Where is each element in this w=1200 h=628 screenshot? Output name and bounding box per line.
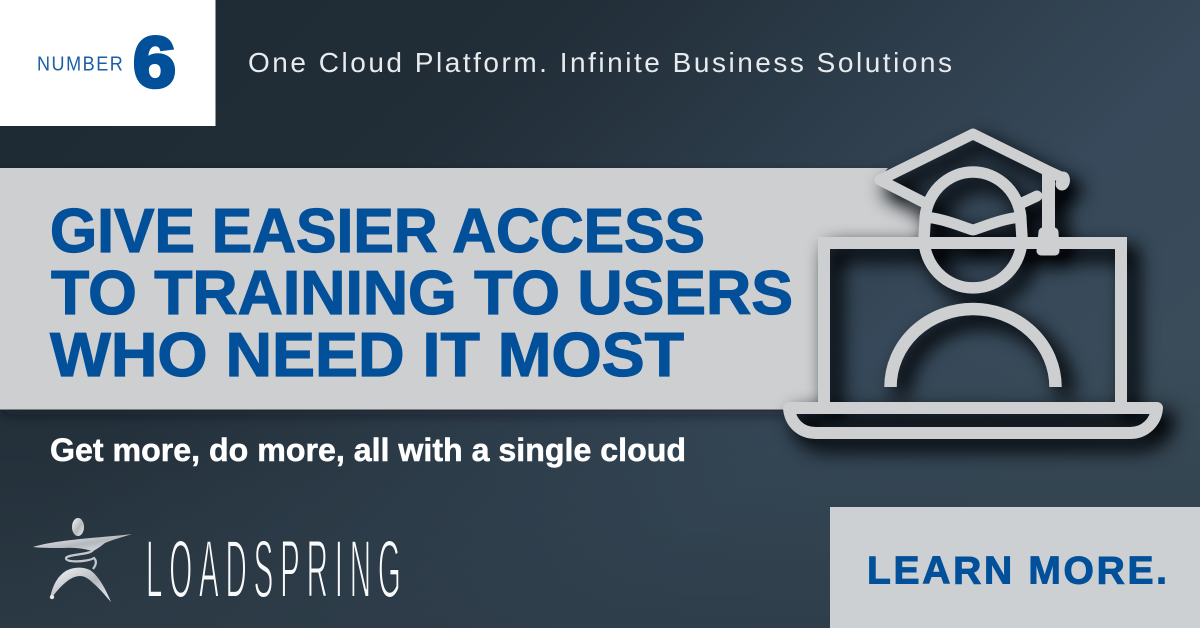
- headline: [50, 197, 793, 390]
- call to action button: [830, 507, 1200, 628]
- badge number: 6: [133, 24, 176, 103]
- button label: LEARN MORE.: [867, 550, 1167, 592]
- headline: GIVE EASIER ACCESS: [50, 197, 705, 266]
- logo: [33, 518, 401, 616]
- tagline: One Cloud Platform. Infinite Business Solutions: [248, 47, 952, 78]
- icon: shoulders: [890, 309, 1056, 387]
- icon: graduate on laptop: [789, 134, 1157, 433]
- logo: figure: [33, 518, 132, 602]
- headline: TO TRAINING TO USERS: [51, 259, 793, 328]
- icon: graduation cap: [880, 134, 1063, 251]
- badge label: NUMBER: [37, 54, 124, 76]
- panel: headline band: [0, 168, 925, 410]
- logo: wordmark: LOADSPRING: [146, 524, 401, 616]
- panel: number badge: [0, 0, 216, 126]
- icon: head: [924, 172, 1022, 288]
- headline: WHO NEED IT MOST: [50, 321, 684, 390]
- subheading: Get more, do more, all with a single cloud: [50, 432, 686, 468]
- icon: laptop: [789, 243, 1157, 433]
